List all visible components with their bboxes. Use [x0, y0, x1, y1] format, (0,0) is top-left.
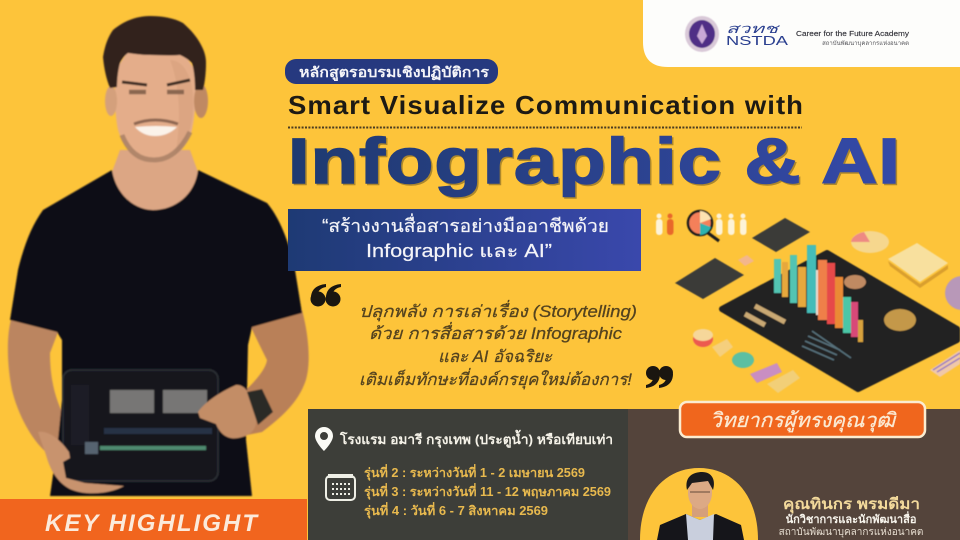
right arm [196, 310, 309, 438]
session 2: รุ่นที่ 2 : ระหว่างวันที่ 1 - 2 เมษายน 2569 [364, 464, 585, 481]
badge text: วิทยากรผู้ทรงคุณวุฒิ [710, 410, 897, 433]
speaker organisation: สถาบันพัฒนาบุคลากรแห่งอนาคต [779, 527, 923, 538]
hair [686, 472, 714, 490]
heading: smart visualize: Smart Visualize Communication with [288, 90, 804, 120]
tablet clip [85, 442, 98, 454]
speaker role: นักวิชาการและนักพัฒนาสื่อ [786, 511, 916, 526]
illustration: isometric dashboard [656, 211, 960, 393]
note card [888, 243, 948, 282]
tablet [722, 253, 957, 389]
tablet pie [884, 309, 916, 331]
right pie [945, 276, 960, 310]
left hand holding tablet [38, 432, 124, 493]
note card side [888, 261, 948, 288]
quote line 1: ปลุกพลัง การเล่าเรื่อง (Storytelling) [359, 300, 637, 322]
striped strip [930, 350, 960, 377]
eyes [129, 90, 184, 94]
person: presenter with tablet [8, 16, 309, 496]
face [688, 477, 712, 509]
heading: infographic and ai: Infographic & AI [290, 126, 902, 198]
left dark card [675, 258, 744, 299]
icon: institution seal [685, 16, 719, 52]
session dates [364, 464, 611, 519]
quote line 2: ด้วย การสื่อสารด้วย Infographic [369, 322, 623, 343]
tablet thumbnail 1 [110, 390, 154, 413]
coin 1 [693, 331, 713, 347]
hair [103, 16, 206, 90]
pie slice [851, 232, 870, 242]
speaker portrait [640, 468, 758, 540]
jacket [657, 514, 744, 540]
smile [135, 126, 177, 136]
quote text [359, 300, 637, 390]
banner: key highlight [0, 499, 307, 540]
eyebrows [122, 80, 190, 85]
icon: location pin [315, 427, 333, 451]
tablet [63, 370, 218, 481]
tablet timeline [100, 446, 206, 450]
panel: venue and dates [308, 409, 628, 540]
stubble [122, 132, 190, 160]
dotted rule [288, 126, 802, 128]
heading face: Infographic & AI [288, 125, 901, 197]
session 4: รุ่นที่ 4 : วันที่ 6 - 7 สิงหาคม 2569 [364, 502, 548, 519]
t-shirt [10, 170, 302, 496]
neck [112, 150, 198, 216]
banner text: KEY HIGHLIGHT [45, 510, 259, 537]
people icons [656, 214, 746, 235]
watch [247, 389, 273, 425]
mustache [134, 120, 178, 124]
block 5 [767, 370, 800, 393]
logo wordmark: สวทช [726, 21, 781, 36]
speaker name: คุณทินกร พรมดีมา [783, 495, 920, 514]
face [115, 48, 196, 163]
panel: tagline [288, 209, 641, 271]
ear right [194, 84, 208, 118]
chip 2 [712, 339, 733, 357]
academy name thai: สถาบันพัฒนาบุคลากรแห่งอนาคต [822, 40, 909, 47]
panel: logo header [643, 0, 960, 67]
tablet data lines [802, 331, 851, 360]
face shadow [170, 60, 193, 156]
quote line 4: เติมเต็มทักษะที่องค์กรยุคใหม่ต้องการ! [359, 368, 632, 390]
block 4 [750, 363, 782, 383]
badge: expert speaker [680, 402, 925, 437]
glasses [690, 491, 710, 493]
tablet small pie [844, 275, 866, 289]
left arm [8, 316, 124, 492]
venue text: โรงแรม อมารี กรุงเทพ (ประตูน้ำ) หรือเทียบเท่า [339, 429, 613, 448]
icon: opening quote [310, 284, 341, 306]
session 3: รุ่นที่ 3 : ระหว่างวันที่ 11 - 12 พฤษภาคม 2569 [364, 483, 611, 500]
panel: speaker [628, 409, 960, 540]
small dark card [752, 218, 810, 252]
tagline line 1: “สร้างงานสื่อสารอย่างมืออาชีพด้วย [322, 213, 609, 236]
coin 1 top [693, 329, 713, 341]
badge: course type [285, 59, 498, 84]
coin 3 [732, 352, 754, 368]
pie chart [851, 231, 889, 253]
logo wordmark english: NSTDA [726, 33, 788, 48]
badge text: หลักสูตรอบรมเชิงปฏิบัติการ [299, 64, 490, 81]
icon: closing quote [646, 366, 673, 388]
tablet bars left [745, 306, 785, 325]
shirt [686, 514, 714, 540]
tagline line 2: Infographic และ AI” [366, 241, 552, 261]
quote line 3: และ AI อัจฉริยะ [438, 348, 553, 366]
bars [774, 245, 863, 342]
academy name: Career for the Future Academy [796, 29, 909, 38]
tablet track [104, 428, 212, 434]
hand on tablet [198, 385, 256, 438]
tablet sidebar [71, 385, 89, 445]
pink chip [738, 255, 754, 266]
ear left [105, 86, 117, 116]
neck [692, 505, 708, 517]
magnifier [688, 211, 719, 241]
icon: calendar [326, 474, 355, 500]
tablet thumbnail 2 [163, 390, 207, 413]
